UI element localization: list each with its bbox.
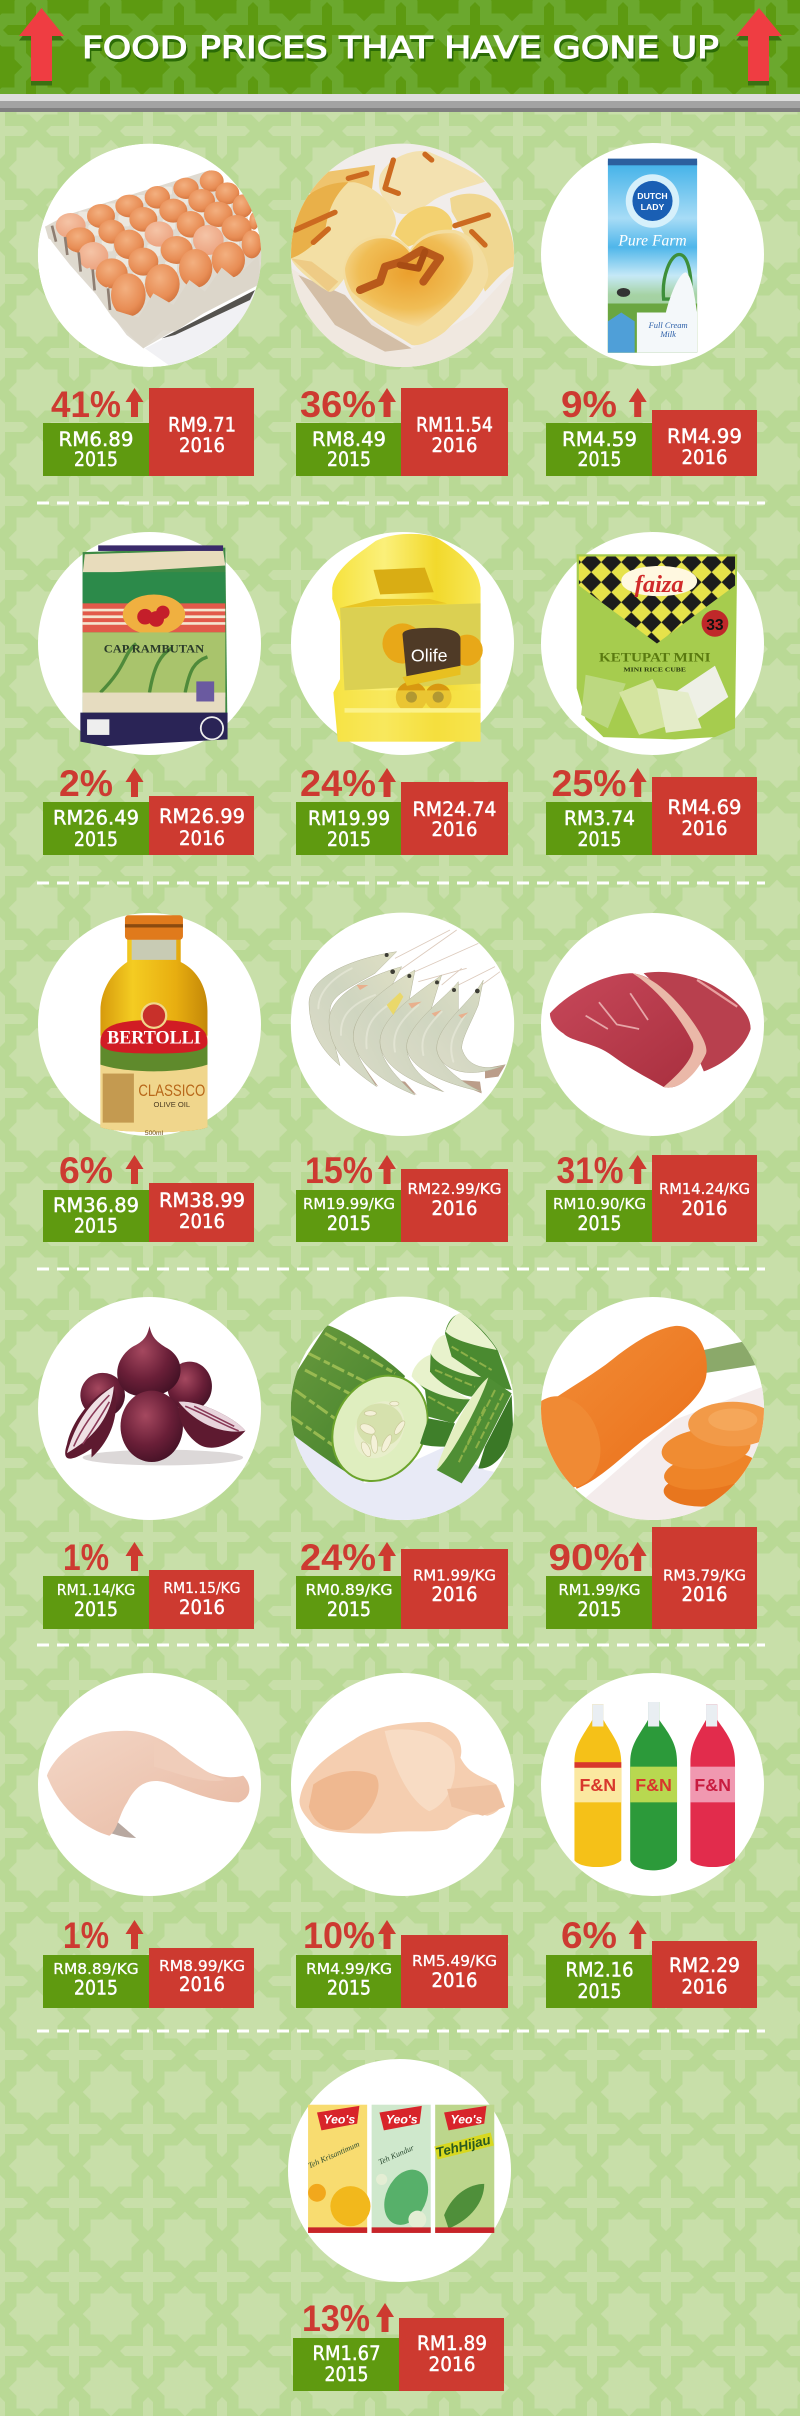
percent increase: 24% [300, 763, 376, 804]
percent increase: 1% [63, 1915, 109, 1956]
2015 price box [296, 1190, 401, 1242]
2015 price box [43, 1955, 149, 2008]
2015 price box: 2015 [74, 1598, 118, 1621]
icon: Dutch Lady milk carton: Milk [659, 329, 676, 339]
2015 price box: 2015 [578, 1212, 622, 1235]
2016 price box: RM2.29 [669, 1954, 740, 1977]
2016 price box: 2016 [179, 1596, 225, 1619]
2016 price box: 2016 [432, 818, 478, 841]
icon: right up arrow [736, 8, 782, 86]
2016 price box: RM11.54 [416, 414, 493, 436]
2015 price box: RM19.99 [308, 807, 390, 830]
percent increase: 90% [548, 1537, 630, 1578]
2016 price box: 2016 [432, 1583, 478, 1606]
2016 price box: RM14.24/KG [659, 1180, 750, 1198]
2015 price box: 2015 [327, 828, 371, 851]
icon: up arrow [629, 1155, 647, 1184]
panel: ketupat [541, 532, 764, 855]
percent increase: 41% [51, 384, 121, 425]
icon: Yeo's drink packs: Yeo's [323, 2113, 355, 2127]
percent increase: 24% [300, 1537, 376, 1578]
icon: Faiza ketupat mini pack: 33 [706, 617, 724, 634]
icon: up arrow [629, 768, 647, 797]
icon: up arrow [126, 768, 144, 797]
2016 price box: RM3.79/KG [663, 1566, 746, 1584]
percent increase: 25% [552, 763, 626, 804]
percent increase: 15% [305, 1150, 373, 1191]
2015 price box [43, 423, 149, 476]
header banner [0, 0, 800, 112]
icon: Bertolli olive oil bottle: CLASSICO [138, 1081, 205, 1100]
2016 price box: 2016 [432, 1197, 478, 1220]
icon: Faiza ketupat mini pack: faiza [635, 571, 684, 598]
2016 price box: 2016 [432, 434, 478, 457]
2015 price box: 2015 [578, 1980, 622, 2003]
icon: Faiza ketupat mini pack: MINI RICE CUBE [624, 666, 687, 673]
2015 price box: 2015 [327, 1212, 371, 1235]
2015 price box [546, 423, 652, 476]
2015 price box: RM6.89 [58, 428, 134, 451]
2016 price box: 2016 [179, 827, 225, 850]
2015 price box: 2015 [74, 1214, 118, 1238]
icon: raw beef steaks [541, 913, 764, 1136]
icon: Dutch Lady milk carton: Pure Farm [617, 233, 687, 250]
2016 price box: RM1.89 [417, 2332, 487, 2355]
2015 price box [546, 1955, 652, 2008]
2015 price box: 2015 [74, 828, 118, 851]
panel: soft drinks [541, 1673, 764, 2008]
2015 price box [296, 802, 401, 855]
2015 price box: RM4.99/KG [306, 1960, 392, 1978]
icon: Yeo's drink packs: Teh Kundur [377, 2143, 416, 2167]
icon: up arrow [378, 768, 396, 797]
2015 price box: RM8.49 [312, 428, 386, 451]
icon: Yeo's drink packs: Yeo's [451, 2113, 482, 2127]
percent increase: 31% [556, 1150, 624, 1191]
2016 price box: 2016 [682, 1583, 728, 1606]
2015 price box: RM1.14/KG [57, 1581, 135, 1599]
2016 price box: 2016 [428, 2353, 476, 2376]
panel: olive oil [38, 913, 261, 1242]
2015 price box: 2015 [74, 1976, 118, 2000]
icon: sliced carrot [541, 1297, 764, 1520]
2016 price box [652, 1941, 757, 2008]
2015 price box: RM4.59 [562, 428, 637, 451]
percent increase: 6% [59, 1150, 113, 1191]
2015 price box: RM19.99/KG [303, 1195, 395, 1213]
divider line [37, 1644, 765, 1646]
percent increase: 9% [561, 384, 617, 425]
icon: F&N bottles: F&N [580, 1775, 616, 1795]
icon: Yeo's drink packs: Yeo's [386, 2113, 418, 2127]
icon: raw chicken leg [38, 1673, 261, 1896]
2015 price box [43, 1190, 149, 1242]
icon: heart-shaped cookies [290, 144, 514, 367]
2016 price box: RM4.99 [667, 425, 742, 448]
icon: up arrow [629, 388, 647, 417]
panel: rice [38, 532, 261, 855]
title: FOOD PRICES THAT HAVE GONE UP [84, 34, 720, 69]
2016 price box [149, 1183, 254, 1242]
panel: milk [541, 143, 764, 476]
2016 price box [401, 782, 508, 855]
icon: Bertolli olive oil bottle [38, 913, 261, 1137]
2016 price box: RM1.99/KG [413, 1566, 496, 1584]
icon: up arrow [126, 1155, 144, 1184]
icon: Cap Rambutan rice bag [38, 532, 261, 755]
2016 price box [149, 1570, 254, 1629]
icon: Dutch Lady milk carton: LADY [641, 202, 665, 212]
icon: left up arrow [19, 8, 64, 86]
2015 price box: RM2.16 [566, 1958, 634, 1982]
icon: up arrow [126, 1920, 144, 1949]
2016 price box [652, 777, 757, 855]
2015 price box: 2015 [327, 1598, 371, 1621]
panel: prawns [291, 913, 514, 1242]
percent increase: 36% [300, 384, 376, 425]
panel: chicken leg [38, 1673, 261, 2008]
2015 price box: RM1.67 [312, 2342, 380, 2365]
2016 price box [401, 1935, 508, 2008]
2015 price box: RM36.89 [53, 1194, 139, 1217]
icon: up arrow [629, 1920, 647, 1949]
2015 price box: 2015 [327, 448, 371, 471]
2016 price box: 2016 [179, 1973, 225, 1996]
2016 price box: 2016 [682, 446, 728, 469]
2015 price box: RM10.90/KG [553, 1195, 646, 1213]
2016 price box: RM22.99/KG [408, 1180, 502, 1198]
panel: carrot [541, 1297, 764, 1629]
percent increase: 1% [63, 1537, 109, 1578]
2016 price box [652, 1527, 757, 1629]
icon: F&N bottles: F&N [694, 1775, 731, 1795]
2015 price box [296, 1576, 401, 1629]
icon: Faiza ketupat mini pack: KETUPAT MINI [599, 650, 711, 664]
2015 price box: RM8.89/KG [53, 1960, 139, 1978]
2016 price box: RM1.15/KG [164, 1579, 240, 1597]
percent increase: 2% [59, 763, 113, 804]
2016 price box [399, 2318, 504, 2391]
icon: up arrow [378, 1155, 396, 1184]
icon: up arrow [378, 1542, 396, 1571]
icon: Bertolli olive oil bottle: BERTOLLI [107, 1027, 201, 1048]
2016 price box: RM24.74 [412, 798, 496, 821]
2015 price box: RM0.89/KG [306, 1581, 392, 1599]
2016 price box [401, 1169, 508, 1242]
icon: Dutch Lady milk carton: DUTCH [637, 191, 668, 201]
2015 price box: 2015 [578, 828, 622, 851]
icon: Dutch Lady milk carton [541, 143, 764, 366]
icon: Olife sunflower oil jug [291, 532, 514, 755]
panel: beef [541, 913, 764, 1242]
title: FOOD PRICES THAT HAVE GONE UP [82, 31, 719, 66]
icon: up arrow [378, 388, 396, 417]
2016 price box: 2016 [682, 1197, 728, 1220]
2015 price box [293, 2338, 399, 2391]
divider line [37, 1268, 765, 1270]
2015 price box [43, 1576, 149, 1629]
2015 price box [43, 802, 149, 855]
2016 price box: 2016 [432, 1969, 478, 1992]
2015 price box: RM1.99/KG [558, 1581, 640, 1599]
2016 price box [149, 796, 254, 855]
2015 price box: 2015 [578, 448, 622, 471]
2015 price box [546, 1576, 652, 1629]
2015 price box [546, 802, 652, 855]
2016 price box: 2016 [682, 817, 728, 840]
icon: up arrow [126, 1542, 144, 1571]
panel: pineapple tarts [285, 135, 525, 476]
icon: Dutch Lady milk carton: Full Cream [648, 320, 688, 330]
icon: tray of eggs [38, 144, 262, 368]
icon: F&N bottles [541, 1673, 764, 1896]
2016 price box: 2016 [682, 1976, 728, 1998]
2015 price box [296, 1955, 401, 2008]
icon: Bertolli olive oil bottle: OLIVE OIL [153, 1100, 190, 1109]
icon: raw prawns [291, 913, 514, 1136]
2015 price box [296, 423, 401, 476]
2015 price box: 2015 [327, 1976, 371, 2000]
icon: red onions [38, 1297, 261, 1520]
2016 price box [652, 410, 757, 476]
icon: up arrow [376, 2303, 394, 2332]
icon: up arrow [126, 388, 144, 417]
icon: up arrow [378, 1920, 396, 1949]
2016 price box [652, 1155, 757, 1242]
2016 price box: 2016 [179, 434, 225, 457]
2015 price box: 2015 [74, 448, 118, 471]
icon: Yeo's drink packs: TehHijau [434, 2132, 492, 2160]
panel: cucumber [285, 1290, 525, 1629]
panel: packet drinks [288, 2059, 511, 2391]
divider line [37, 882, 765, 884]
icon: Yeo's drink packs [288, 2059, 511, 2282]
panel: whole chicken [291, 1673, 514, 2008]
2016 price box: RM38.99 [159, 1189, 245, 1212]
2016 price box: 2016 [179, 1210, 225, 1233]
2016 price box [149, 388, 254, 476]
icon: Bertolli olive oil bottle: 500ml [145, 1130, 164, 1137]
panel: onions [38, 1297, 261, 1629]
2016 price box [149, 1948, 254, 2008]
2016 price box: RM8.99/KG [159, 1957, 245, 1975]
divider line [37, 2030, 765, 2032]
percent increase: 10% [303, 1915, 375, 1956]
2016 price box [401, 1549, 508, 1629]
2016 price box: RM26.99 [159, 805, 245, 828]
icon: up arrow [629, 1542, 647, 1571]
icon: raw whole chicken [291, 1673, 514, 1896]
2015 price box: 2015 [578, 1598, 622, 1621]
icon: Cap Rambutan rice bag: CAP RAMBUTAN [104, 641, 204, 655]
2015 price box: RM26.49 [53, 806, 139, 830]
2016 price box: RM5.49/KG [412, 1952, 497, 1970]
2015 price box [546, 1190, 652, 1242]
icon: F&N bottles: F&N [635, 1775, 672, 1795]
divider line [37, 502, 765, 504]
2016 price box: RM4.69 [668, 796, 742, 819]
icon: Faiza ketupat mini pack [541, 532, 764, 755]
percent increase: 13% [302, 2298, 370, 2339]
icon: sliced cucumber [290, 1296, 514, 1520]
2015 price box: 2015 [324, 2363, 368, 2386]
icon: Olife sunflower oil jug: Olife [411, 645, 448, 665]
percent increase: 6% [561, 1915, 617, 1956]
2016 price box [401, 388, 508, 476]
panel: cooking oil [291, 532, 514, 855]
2015 price box: RM3.74 [564, 807, 635, 830]
icon: Yeo's drink packs: Teh Krisantimum [307, 2139, 361, 2170]
panel: eggs [38, 144, 262, 476]
2016 price box: RM9.71 [168, 414, 236, 436]
